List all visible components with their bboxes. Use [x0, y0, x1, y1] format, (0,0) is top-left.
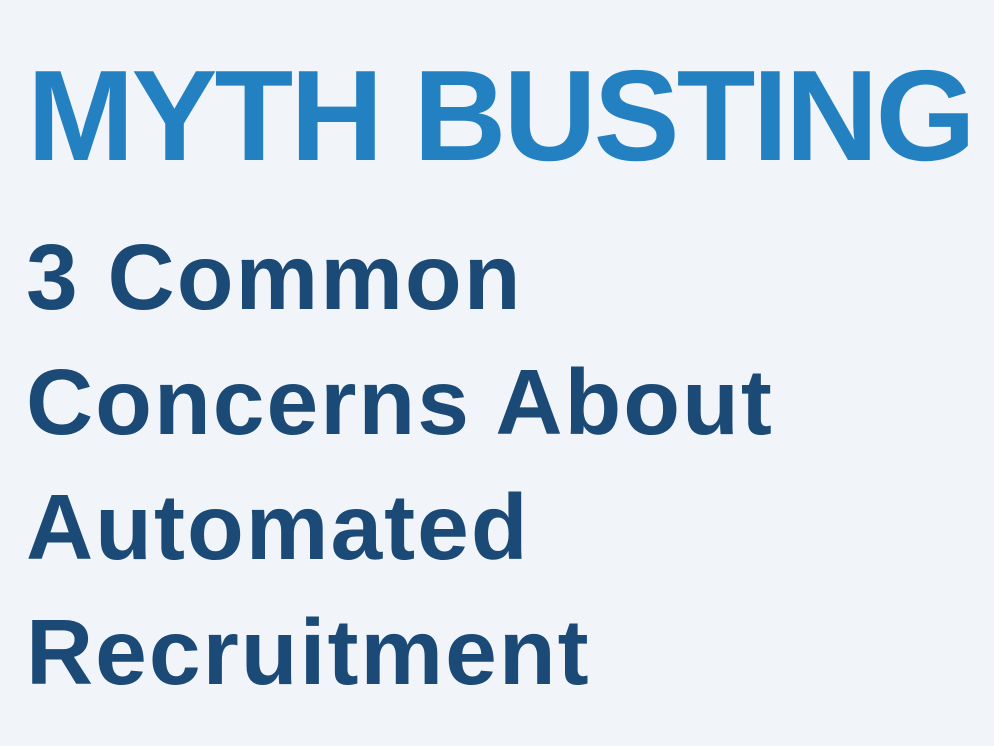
subtitle — [26, 225, 774, 704]
subtitle: Recruitment — [26, 600, 591, 704]
title: MYTH BUSTING — [27, 44, 973, 188]
subtitle: Concerns About — [26, 350, 774, 454]
subtitle: 3 Common — [26, 225, 523, 329]
subtitle: Automated — [26, 475, 530, 579]
